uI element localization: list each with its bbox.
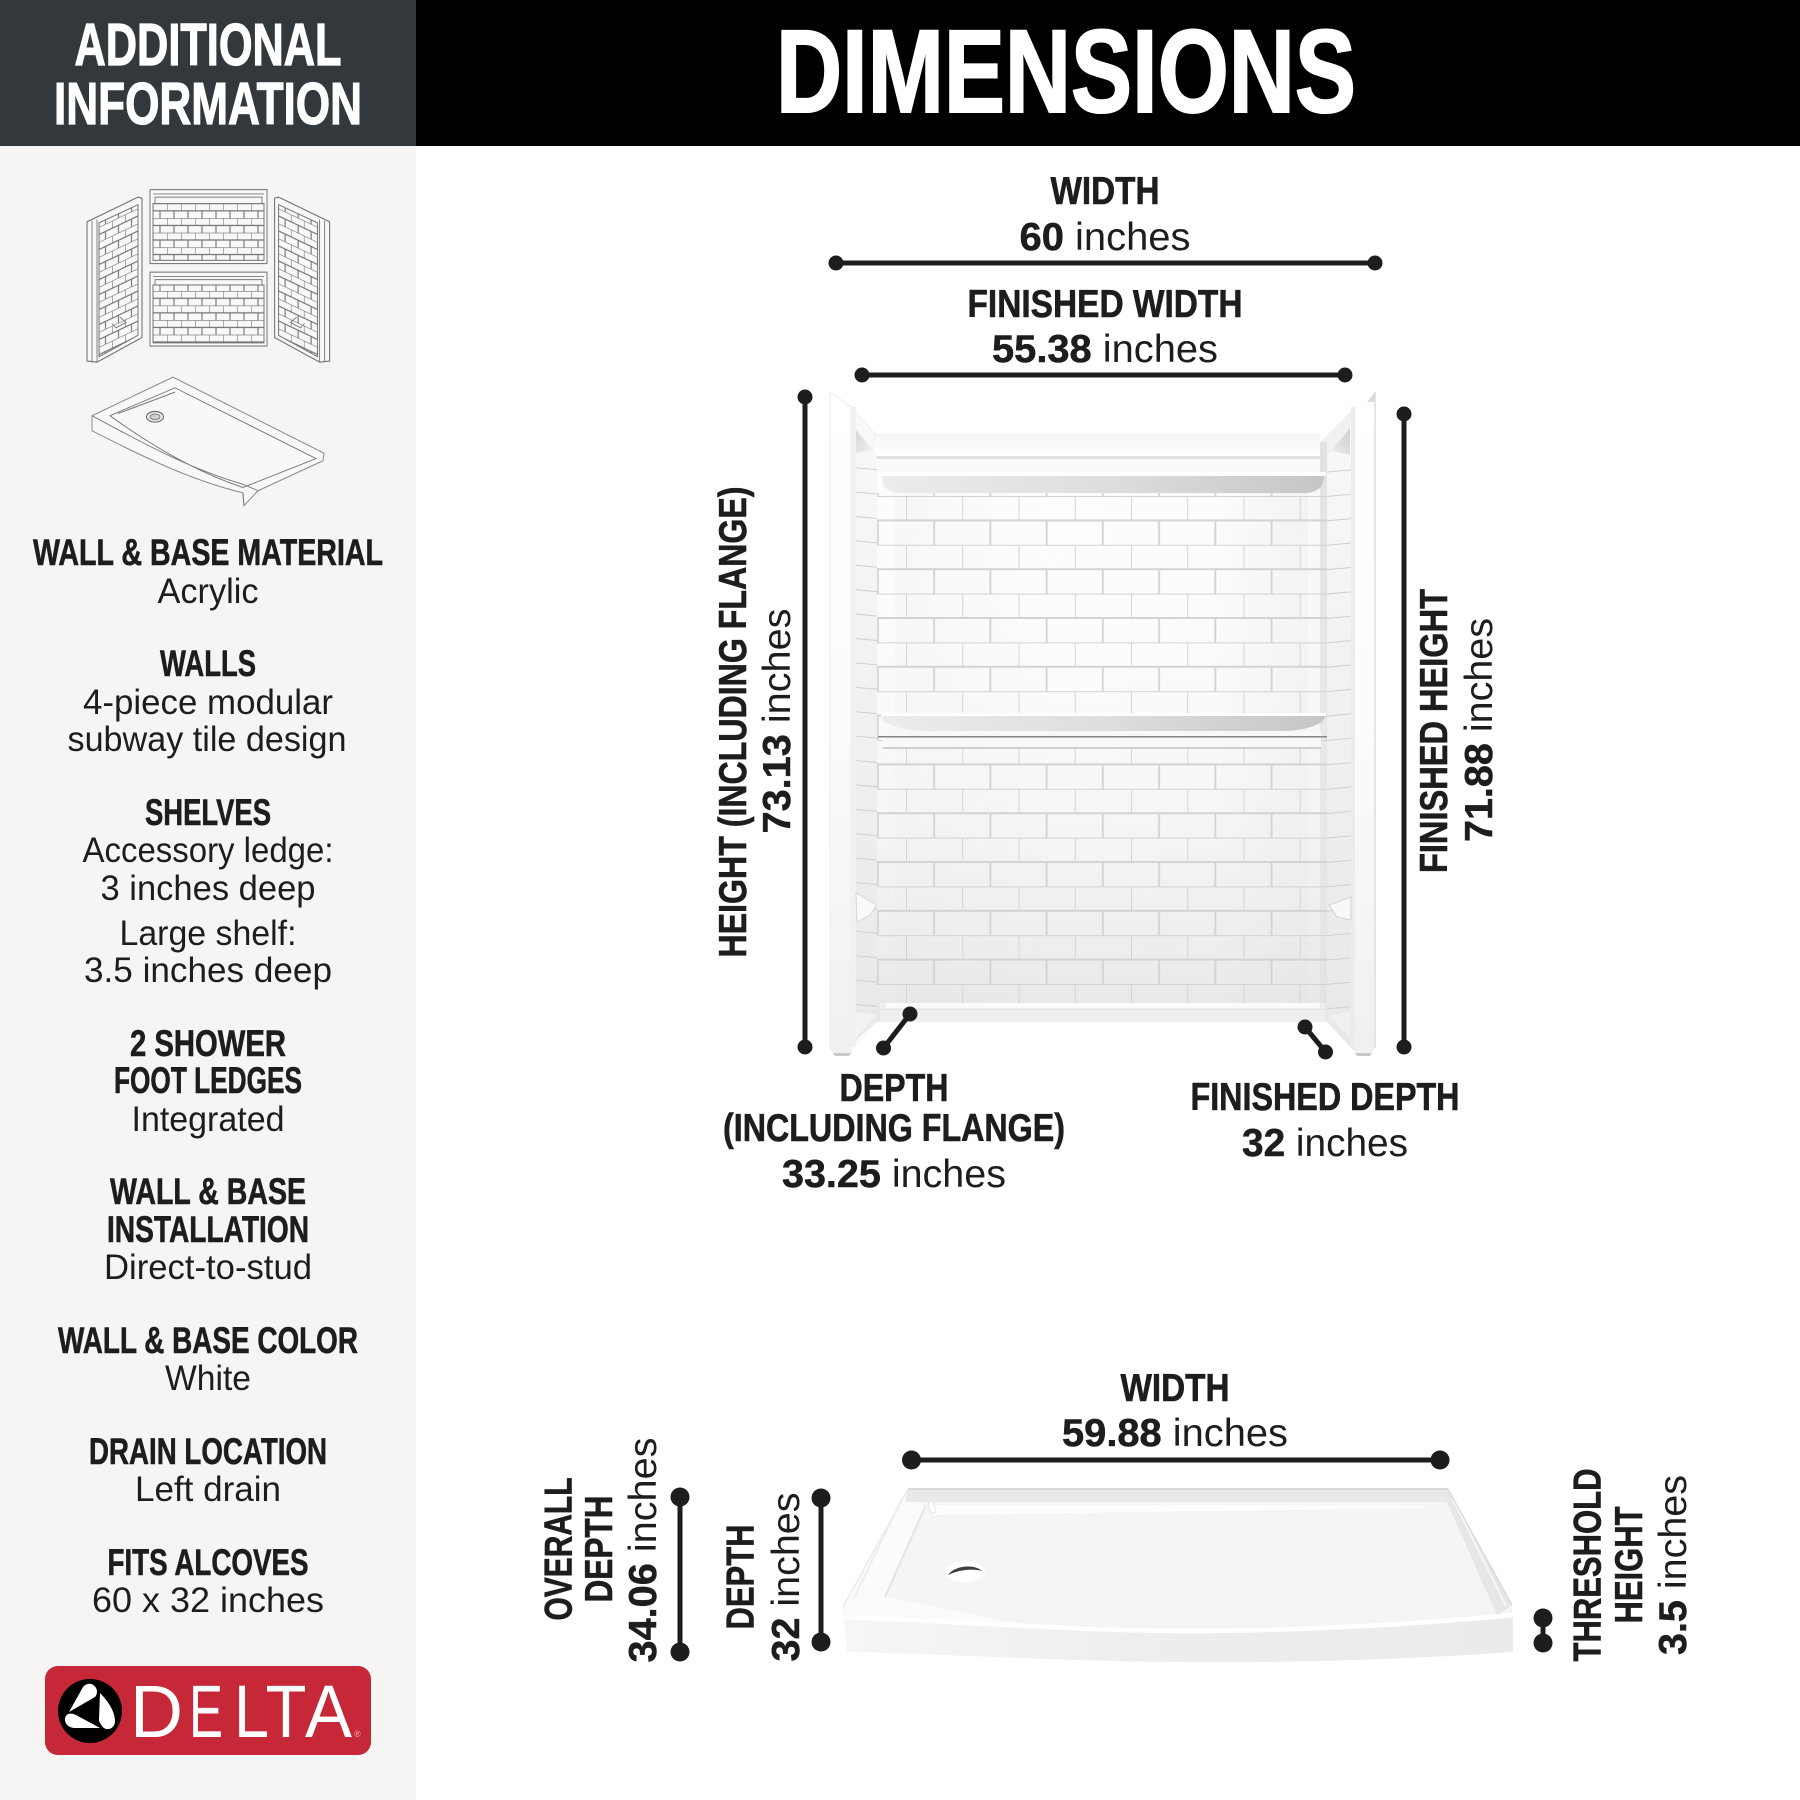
spec: fits alcoves <box>92 1542 324 1620</box>
spec: shower foot ledges: 2 SHOWER <box>130 1023 286 1064</box>
spec: installation: WALL & BASE <box>110 1171 306 1212</box>
spec: walls <box>68 643 346 759</box>
dimension: overall width: 60 inches <box>1020 216 1190 259</box>
logo: delta: L <box>234 1670 269 1753</box>
dimension: threshold height: THRESHOLD <box>1566 1468 1610 1662</box>
arrow: finished width <box>854 368 1352 382</box>
arrow: base depth <box>812 1488 830 1652</box>
side walls <box>851 407 1355 1052</box>
sidebar heading <box>54 12 362 137</box>
dimension: overall depth <box>538 1438 690 1662</box>
arrow: base width <box>902 1450 1450 1470</box>
spec: color: WALL & BASE COLOR <box>58 1320 358 1361</box>
dimension: base depth <box>720 1488 830 1662</box>
spec: installation: Direct-to-stud <box>104 1248 312 1287</box>
line drawing: shower base <box>92 377 324 506</box>
drain <box>945 1562 985 1582</box>
spec: shelves: 3.5 inches deep <box>84 951 332 990</box>
spec: drain location: Left drain <box>135 1470 281 1509</box>
spec: wall and base material: WALL & BASE MATERIAL <box>33 532 383 573</box>
sidebar panel: additional information <box>0 0 416 1800</box>
dimension: overall depth: DEPTH <box>578 1496 621 1602</box>
dimension: depth including flange: 33.25 inches <box>782 1153 1006 1196</box>
arrow: threshold height <box>1534 1608 1552 1652</box>
spec: fits alcoves: FITS ALCOVES <box>108 1542 308 1583</box>
shower wall photo <box>830 392 1375 1056</box>
dimension: overall width: WIDTH <box>1050 170 1160 213</box>
dimension: base width: WIDTH <box>1120 1367 1230 1410</box>
dimension: depth including flange: DEPTH <box>840 1067 948 1110</box>
spec: color: White <box>165 1359 251 1398</box>
dimension: finished height: 71.88 inches <box>1458 618 1501 842</box>
large shelf <box>878 713 1327 749</box>
spec: walls: subway tile design <box>68 720 346 759</box>
spec: walls: 4-piece modular <box>83 683 333 722</box>
dimension: overall depth: 34.06 inches <box>622 1438 665 1662</box>
logo: delta: D <box>130 1670 183 1753</box>
dimension: threshold height: HEIGHT <box>1608 1506 1651 1624</box>
dimension: base depth: DEPTH <box>720 1524 762 1630</box>
dimension: finished depth: 32 inches <box>1242 1122 1408 1165</box>
arrow: finished depth <box>1298 1020 1333 1060</box>
sidebar heading: ADDITIONAL <box>74 12 342 78</box>
logo: delta <box>45 1666 371 1755</box>
title: dimensions: DIMENSIONS <box>776 6 1356 138</box>
spec: shower foot ledges <box>114 1023 302 1139</box>
flanges <box>830 392 1375 1056</box>
logo: delta: E <box>189 1670 223 1753</box>
dimension: threshold height: 3.5 inches <box>1652 1475 1695 1655</box>
spec: shelves: Large shelf: <box>120 914 296 953</box>
spec: fits alcoves: 60 x 32 inches <box>92 1581 324 1620</box>
spec: shelves <box>82 792 334 990</box>
dimension: overall width <box>828 170 1382 270</box>
spec: shower foot ledges: FOOT LEDGES <box>114 1060 302 1101</box>
sidebar heading: INFORMATION <box>54 71 362 137</box>
arrow: finished height <box>1396 406 1412 1054</box>
arrow: height <box>798 390 812 1054</box>
dimension: base width <box>902 1367 1450 1470</box>
spec: color <box>58 1320 358 1398</box>
spec: installation: INSTALLATION <box>107 1209 309 1250</box>
logo: delta: A <box>305 1670 353 1753</box>
dimension: finished depth: FINISHED DEPTH <box>1190 1076 1460 1119</box>
spec: shower foot ledges: Integrated <box>132 1100 284 1139</box>
dimension: finished width: 55.38 inches <box>992 328 1218 371</box>
dimension: finished height <box>1396 406 1501 1054</box>
dimension: finished height: FINISHED HEIGHT <box>1413 589 1456 873</box>
spec: installation <box>104 1171 312 1287</box>
dimension: finished depth <box>1190 1020 1460 1165</box>
dimension: base width: 59.88 inches <box>1062 1412 1288 1455</box>
line drawing: wall panels <box>87 190 330 362</box>
logo: delta: T <box>266 1670 306 1753</box>
dimension: base depth: 32 inches <box>765 1492 808 1662</box>
dimension: height including flange: 73.13 inches <box>756 608 799 834</box>
header band: dimensions <box>416 0 1800 146</box>
spec: shelves: Accessory ledge: <box>82 831 334 870</box>
arrow: overall depth <box>670 1488 690 1662</box>
accessory ledge shelf <box>881 472 1326 493</box>
spec: wall and base material <box>33 532 383 611</box>
dimension: overall depth: OVERALL <box>538 1478 580 1620</box>
dimension: finished width: FINISHED WIDTH <box>968 283 1242 326</box>
foot ledges <box>856 893 1351 922</box>
spec: shelves: 3 inches deep <box>100 869 316 908</box>
logo: delta: ® <box>354 1729 361 1739</box>
dimension: finished width <box>854 283 1352 382</box>
spec: drain location: DRAIN LOCATION <box>89 1431 327 1472</box>
back wall with subway tile <box>873 433 1327 1022</box>
spec: drain location <box>89 1431 327 1509</box>
spec: wall and base material: Acrylic <box>158 572 258 611</box>
dimension: height including flange <box>712 390 812 1054</box>
spec: walls: WALLS <box>160 643 256 684</box>
arrow: width <box>828 256 1382 270</box>
dimension: height including flange: HEIGHT (INCLUDING FLANGE) <box>712 486 755 958</box>
arrow: depth <box>876 1006 918 1056</box>
dimension: depth including flange: (INCLUDING FLANGE) <box>723 1107 1065 1150</box>
shower base photo <box>843 1489 1513 1662</box>
dimension: threshold height <box>1534 1468 1695 1662</box>
dimension: depth including flange <box>723 1006 1065 1196</box>
spec: shelves: SHELVES <box>145 792 271 833</box>
